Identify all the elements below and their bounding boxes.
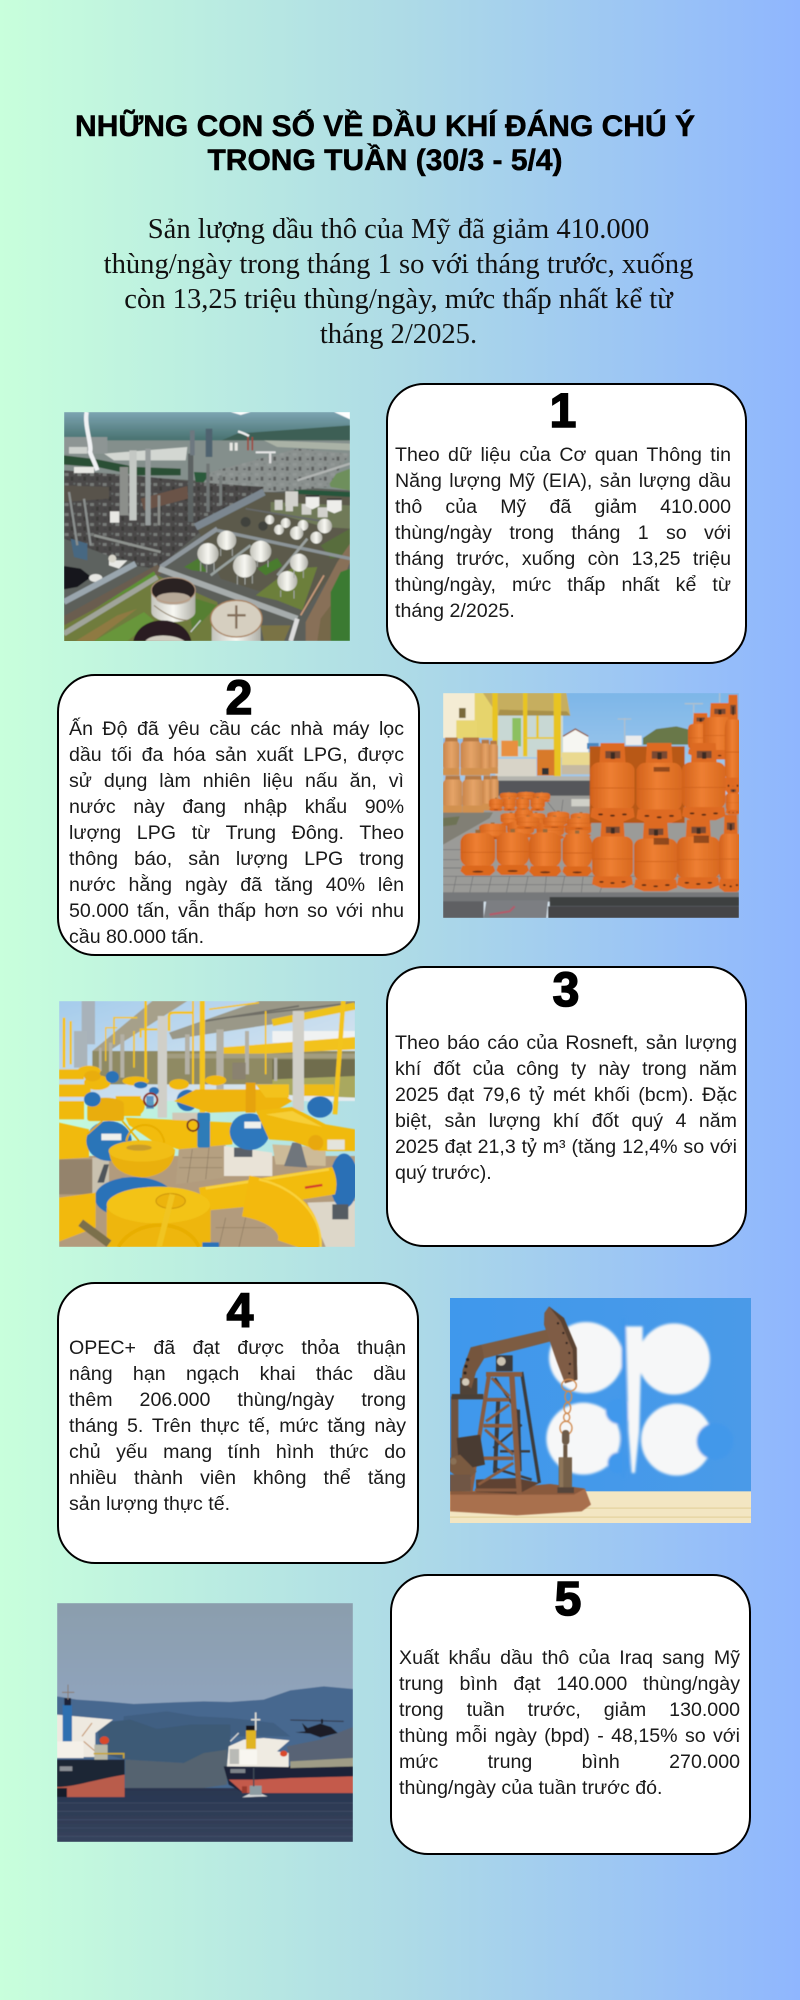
card 4 text: nhiều thành viên không thể tăng [69,1467,406,1489]
card 4 text: nâng hạn ngạch khai thác dầu [69,1363,406,1385]
title [75,109,695,177]
card 5 text: trong tuần trước, giảm 130.000 [399,1699,740,1721]
card 3 text: khí đốt của công ty này trong năm [395,1058,737,1080]
number 5: 5 [555,1573,581,1626]
card 5 text: thùng mỗi ngày (bpd) - 48,15% so với [399,1725,740,1747]
card 2 text: nước hằng ngày đã tăng 40% lên [69,874,404,896]
title: NHỮNG CON SỐ VỀ DẦU KHÍ ĐÁNG CHÚ Ý [75,110,695,143]
card 2 text: sử dụng làm nhiên liệu nấu ăn, vì [69,770,404,792]
number 2: 2 [226,672,252,725]
card 3 text [395,1032,737,1184]
panel: card 5 [390,1574,751,1855]
title: TRONG TUẦN (30/3 - 5/4) [207,144,563,177]
card 3 text: quý trước). [395,1162,492,1184]
number 4: 4 [227,1285,253,1338]
card 2 text: dầu tối đa hóa sản xuất LPG, được [69,744,404,766]
panel: card 3 [386,966,747,1247]
photo: tankers and helicopter at sea [57,1603,353,1842]
card 5 text: Xuất khẩu dầu thô của Iraq sang Mỹ [399,1647,740,1669]
card 4 text: sản lượng thực tế. [69,1493,230,1515]
card 3 text: Theo báo cáo của Rosneft, sản lượng [395,1032,737,1054]
card 5 text: trung bình đạt 140.000 thùng/ngày [399,1673,740,1695]
card 4 text: tháng 5. Trên thực tế, mức tăng này [69,1415,406,1437]
intro text: thùng/ngày trong tháng 1 so với tháng trước, xuống [104,249,693,280]
card 3 text: 2025 đạt 79,6 tỷ mét khối (bcm). Đặc [395,1084,737,1106]
intro text: Sản lượng dầu thô của Mỹ đã giảm 410.000 [148,214,649,245]
card 1 text: tháng 2/2025. [395,600,515,622]
intro text: còn 13,25 triệu thùng/ngày, mức thấp nhất kể từ [124,284,673,315]
card 4 text: chủ yếu mang tính hình thức do [69,1441,406,1463]
card 2 text: lượng LPG từ Trung Đông. Theo [69,822,404,844]
photo: yellow gas pipelines [59,1001,355,1247]
card 5 text [399,1647,740,1799]
card 3 text: 2025 đạt 21,3 tỷ m³ (tăng 12,4% so với [395,1136,737,1158]
panel: card 2 [57,674,420,956]
panel: card 1 [386,383,747,664]
card 2 text: 50.000 tấn, vẫn thấp hơn so với nhu [69,900,404,922]
card 1 text [395,444,731,622]
card 5 text: mức trung bình 270.000 [399,1751,740,1773]
intro text: tháng 2/2025. [320,319,477,350]
card 4 text: thêm 206.000 thùng/ngày trong [69,1389,406,1411]
card 1 text: Năng lượng Mỹ (EIA), sản lượng dầu [395,470,731,492]
card 2 text: thông báo, sản lượng LPG trong [69,848,404,870]
card 1 text: Theo dữ liệu của Cơ quan Thông tin [395,444,731,466]
card 4 text [69,1337,406,1515]
photo: OPEC logo and copper pumpjack [450,1298,751,1523]
panel: card 4 [57,1282,419,1564]
card 1 text: thô của Mỹ đã giảm 410.000 [395,496,731,518]
photo: refinery aerial view [64,412,350,641]
card 2 text [69,718,404,948]
card 3 text: biệt, sản lượng khí đốt quý 4 năm [395,1110,737,1132]
card 2 text: cầu 80.000 tấn. [69,926,204,948]
intro text [104,214,693,350]
card 5 text: thùng/ngày của tuần trước đó. [399,1777,662,1799]
card 1 text: thùng/ngày trong tháng 1 so với [395,522,731,544]
card 1 text: tháng trước, xuống còn 13,25 triệu [395,548,731,570]
number 1: 1 [550,385,576,438]
card 4 text: OPEC+ đã đạt được thỏa thuận [69,1337,406,1359]
card 2 text: Ấn Độ đã yêu cầu các nhà máy lọc [69,718,404,740]
card 2 text: nước này đang nhập khẩu 90% [69,796,404,818]
card 1 text: thùng/ngày, mức thấp nhất kể từ [395,574,731,596]
photo: orange LPG cylinders [443,693,739,918]
number 3: 3 [553,964,579,1017]
